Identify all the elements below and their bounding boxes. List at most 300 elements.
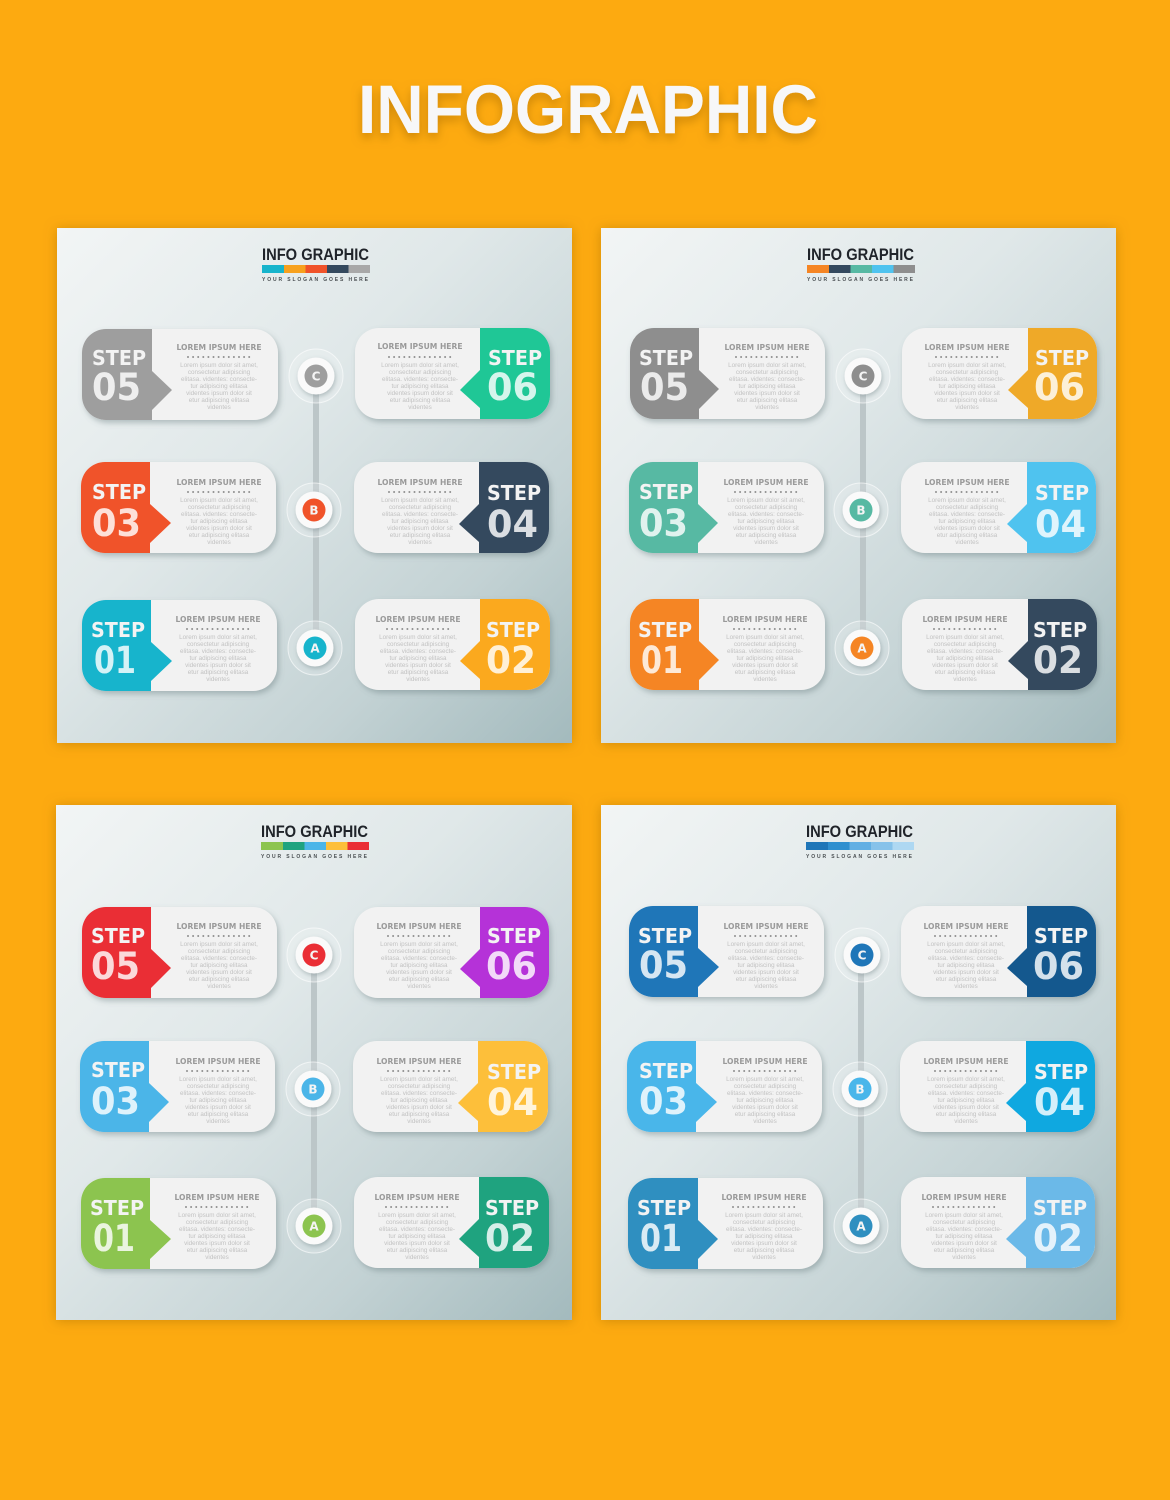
card: step 02: videntes ipsum dolor sit [384, 1240, 450, 1247]
card: step 03: videntes [207, 539, 231, 546]
card: step 04: STEP [487, 481, 541, 505]
card: step 06: Lorem ipsum dolor sit amet, [380, 941, 458, 948]
card: step 06: Lorem ipsum dolor sit amet, [381, 362, 459, 369]
card: step 01: LOREM IPSUM HERE [175, 615, 261, 624]
card: step 03: consectetur adipiscing [735, 504, 798, 511]
card: step 02: 02 [485, 1217, 535, 1260]
card: step 05: 05 [639, 944, 688, 987]
card: step 02: Lorem ipsum dolor sit amet, [925, 1212, 1003, 1219]
card: step 06: Lorem ipsum dolor sit amet, [927, 941, 1005, 948]
card: step 04: elitasa. videntes: consecte- [928, 1090, 1004, 1097]
card: step 04: LOREM IPSUM HERE [924, 478, 1010, 487]
card: step 03: LOREM IPSUM HERE [722, 1057, 808, 1066]
card: step 04: videntes ipsum dolor sit [387, 525, 453, 532]
card: step 01: LOREM IPSUM HERE [721, 1193, 807, 1202]
card: step 01: tur adipiscing elitasa [736, 655, 794, 662]
card: step 04: videntes [955, 539, 979, 546]
card: step 02: STEP [1033, 1196, 1087, 1220]
card: step 01 [628, 1178, 823, 1269]
marker C: C [310, 948, 319, 962]
card: step 02: LOREM IPSUM HERE [921, 1193, 1007, 1202]
card: step 04: consectetur adipiscing [388, 1083, 451, 1090]
card: step 04: Lorem ipsum dolor sit amet, [381, 497, 459, 504]
card: step 05: consectetur adipiscing [735, 948, 798, 955]
card: step 04: elitasa. videntes: consecte- [381, 1090, 457, 1097]
card: step 01: Lorem ipsum dolor sit amet, [725, 1212, 803, 1219]
card: step 01: videntes [753, 676, 777, 683]
card: step 04 [900, 1041, 1095, 1132]
card: step 04: tur adipiscing elitasa [938, 518, 996, 525]
card: step 03 [627, 1041, 822, 1132]
card: step 04: STEP [1034, 1060, 1088, 1084]
card: step 04: videntes ipsum dolor sit [933, 1104, 999, 1111]
card: step 05: etur adipiscing elitasa [189, 397, 250, 404]
card: step 01: STEP [638, 618, 692, 642]
panel header: YOUR SLOGAN GOES HERE [261, 854, 368, 860]
card: step 01 [82, 600, 277, 691]
card: step 03: elitasa. videntes: consecte- [180, 1090, 256, 1097]
card: step 01: videntes ipsum dolor sit [731, 1240, 797, 1247]
panel header: YOUR SLOGAN GOES HERE [806, 854, 913, 860]
card: step 05: etur adipiscing elitasa [737, 397, 798, 404]
card: step 01: 01 [641, 639, 683, 682]
card: step 01: elitasa. videntes: consecte- [726, 1226, 802, 1233]
card: step 04: tur adipiscing elitasa [390, 1097, 448, 1104]
card: step 01 [630, 599, 825, 690]
card: step 06: elitasa. videntes: consecte- [929, 376, 1005, 383]
card: step 06: LOREM IPSUM HERE [377, 342, 463, 351]
card: step 05: LOREM IPSUM HERE [723, 922, 809, 931]
card: step 03: STEP [639, 1059, 693, 1083]
card: step 01: consectetur adipiscing [186, 1219, 249, 1226]
card: step 03: consectetur adipiscing [188, 504, 251, 511]
card: step 04: videntes [954, 1118, 978, 1125]
card: step 04: videntes [407, 1118, 431, 1125]
card: step 03 [629, 462, 824, 553]
card: step 02: consectetur adipiscing [386, 1219, 449, 1226]
card: step 01: videntes ipsum dolor sit [185, 662, 251, 669]
title: INFOGRAPHIC [358, 71, 818, 148]
marker C [287, 928, 341, 982]
card: step 05: tur adipiscing elitasa [738, 383, 796, 390]
card: step 02: consectetur adipiscing [933, 1219, 996, 1226]
card: step 02: 02 [1033, 639, 1083, 682]
card: step 06: etur adipiscing elitasa [936, 976, 997, 983]
card: step 03: elitasa. videntes: consecte- [728, 511, 804, 518]
card: step 03: STEP [639, 480, 693, 504]
card: step 04: 04 [487, 1081, 538, 1124]
card: step 02: elitasa. videntes: consecte- [926, 1226, 1002, 1233]
card: step 01: STEP [90, 1196, 144, 1220]
card: step 04: etur adipiscing elitasa [937, 532, 998, 539]
card: step 03: tur adipiscing elitasa [737, 518, 795, 525]
marker C [835, 928, 889, 982]
card: step 04: Lorem ipsum dolor sit amet, [927, 1076, 1005, 1083]
card: step 02: videntes [953, 676, 977, 683]
card: step 03: elitasa. videntes: consecte- [727, 1090, 803, 1097]
panel: bottom left [56, 805, 572, 1320]
card: step 02: LOREM IPSUM HERE [375, 615, 461, 624]
card: step 02: STEP [1033, 618, 1087, 642]
card: step 06: STEP [488, 346, 542, 370]
card: step 06: tur adipiscing elitasa [390, 962, 448, 969]
card: step 02: tur adipiscing elitasa [936, 655, 994, 662]
card: step 06: videntes ipsum dolor sit [933, 969, 999, 976]
card: step 04: consectetur adipiscing [389, 504, 452, 511]
card: step 05: videntes ipsum dolor sit [733, 969, 799, 976]
card: step 05: videntes [754, 983, 778, 990]
card: step 06: 06 [1034, 366, 1085, 409]
marker A [835, 621, 889, 675]
card: step 01: tur adipiscing elitasa [189, 655, 247, 662]
card: step 04: elitasa. videntes: consecte- [382, 511, 458, 518]
card: step 05 [629, 906, 824, 997]
card: step 01: etur adipiscing elitasa [187, 1247, 248, 1254]
card: step 04: videntes ipsum dolor sit [386, 1104, 452, 1111]
card: step 05 [630, 328, 825, 419]
panel: bottom right [601, 805, 1116, 1320]
card: step 02: 02 [1033, 1217, 1083, 1260]
card: step 02: STEP [485, 1196, 539, 1220]
card: step 02: elitasa. videntes: consecte- [379, 1226, 455, 1233]
card: step 02: STEP [486, 618, 540, 642]
card: step 01: STEP [91, 618, 145, 642]
marker A: A [856, 1220, 866, 1234]
card: step 04: STEP [1035, 481, 1089, 505]
card: step 04: videntes [408, 539, 432, 546]
marker A [834, 1199, 888, 1253]
card: step 05: elitasa. videntes: consecte- [181, 376, 257, 383]
card: step 03: etur adipiscing elitasa [736, 532, 797, 539]
card: step 04: consectetur adipiscing [936, 504, 999, 511]
card: step 05: videntes ipsum dolor sit [186, 969, 252, 976]
card: step 03: 03 [639, 1080, 688, 1123]
panel header: INFO GRAPHIC [807, 245, 914, 264]
card: step 02: 02 [486, 639, 536, 682]
panel header [807, 245, 915, 283]
card: step 05: LOREM IPSUM HERE [724, 343, 810, 352]
marker B: B [309, 504, 319, 518]
card: step 04 [353, 1041, 548, 1132]
card: step 01: videntes ipsum dolor sit [184, 1240, 250, 1247]
card: step 05: Lorem ipsum dolor sit amet, [727, 941, 805, 948]
card: step 06: elitasa. videntes: consecte- [382, 376, 458, 383]
card: step 02: tur adipiscing elitasa [935, 1233, 993, 1240]
card: step 03: STEP [92, 480, 146, 504]
card: step 05: STEP [92, 346, 146, 370]
card: step 02: videntes [406, 676, 430, 683]
card: step 02: tur adipiscing elitasa [389, 655, 447, 662]
card: step 03: consectetur adipiscing [734, 1083, 797, 1090]
card: step 02: Lorem ipsum dolor sit amet, [379, 634, 457, 641]
card: step 03: etur adipiscing elitasa [735, 1111, 796, 1118]
marker B: B [855, 1082, 865, 1096]
card: step 02: LOREM IPSUM HERE [922, 615, 1008, 624]
card: step 01: elitasa. videntes: consecte- [727, 648, 803, 655]
card: step 04: LOREM IPSUM HERE [377, 478, 463, 487]
card: step 04: Lorem ipsum dolor sit amet, [928, 497, 1006, 504]
panel header [262, 245, 370, 283]
panel header: INFO GRAPHIC [261, 822, 368, 841]
card: step 01: videntes ipsum dolor sit [732, 662, 798, 669]
card: step 06: consectetur adipiscing [389, 369, 452, 376]
card: step 05: etur adipiscing elitasa [189, 976, 250, 983]
marker C: C [858, 948, 867, 962]
card: step 05: STEP [91, 924, 145, 948]
card: step 05: consectetur adipiscing [188, 369, 251, 376]
card: step 05: 05 [91, 945, 140, 988]
card: step 03: videntes [206, 1118, 230, 1125]
card: step 06: elitasa. videntes: consecte- [928, 955, 1004, 962]
card: step 05: Lorem ipsum dolor sit amet, [180, 941, 258, 948]
card: step 06 [355, 328, 550, 419]
card: step 05: videntes [755, 404, 779, 411]
card: step 02: LOREM IPSUM HERE [374, 1193, 460, 1202]
card: step 05: tur adipiscing elitasa [190, 962, 248, 969]
card: step 03: videntes ipsum dolor sit [186, 525, 252, 532]
card: step 01: Lorem ipsum dolor sit amet, [726, 634, 804, 641]
timeline connector [858, 955, 864, 1226]
card: step 02: etur adipiscing elitasa [934, 1247, 995, 1254]
card: step 01: videntes [206, 676, 230, 683]
marker A [288, 621, 342, 675]
card: step 05: 05 [640, 366, 689, 409]
card: step 04: Lorem ipsum dolor sit amet, [380, 1076, 458, 1083]
card: step 03: LOREM IPSUM HERE [723, 478, 809, 487]
card: step 01: elitasa. videntes: consecte- [179, 1226, 255, 1233]
card: step 01: STEP [637, 1196, 691, 1220]
card: step 05: STEP [639, 346, 693, 370]
card: step 02: tur adipiscing elitasa [388, 1233, 446, 1240]
card: step 02: etur adipiscing elitasa [388, 669, 449, 676]
card: step 06: consectetur adipiscing [388, 948, 451, 955]
card: step 06 [901, 906, 1096, 997]
panel header: YOUR SLOGAN GOES HERE [807, 277, 914, 283]
card: step 06: etur adipiscing elitasa [389, 976, 450, 983]
panel header [806, 822, 914, 860]
card: step 03 [80, 1041, 275, 1132]
card: step 05 [82, 329, 278, 420]
card: step 06: videntes [407, 983, 431, 990]
panel: top left [57, 228, 572, 743]
card: step 02: Lorem ipsum dolor sit amet, [926, 634, 1004, 641]
card: step 05: LOREM IPSUM HERE [176, 343, 262, 352]
card: step 04: etur adipiscing elitasa [389, 1111, 450, 1118]
panel header: YOUR SLOGAN GOES HERE [262, 277, 369, 283]
card: step 04: 04 [1035, 503, 1086, 546]
card: step 02: elitasa. videntes: consecte- [380, 648, 456, 655]
card: step 03 [81, 462, 276, 553]
card: step 04 [901, 462, 1096, 553]
card: step 04: tur adipiscing elitasa [937, 1097, 995, 1104]
card: step 03: 03 [92, 502, 141, 545]
card: step 03: 03 [639, 502, 688, 545]
card: step 05: videntes ipsum dolor sit [734, 390, 800, 397]
card: step 06 [902, 328, 1097, 419]
card: step 06: videntes ipsum dolor sit [386, 969, 452, 976]
card: step 03: videntes ipsum dolor sit [732, 1104, 798, 1111]
card: step 05: tur adipiscing elitasa [190, 383, 248, 390]
card: step 06: etur adipiscing elitasa [390, 397, 451, 404]
card: step 06: tur adipiscing elitasa [391, 383, 449, 390]
card: step 06: elitasa. videntes: consecte- [381, 955, 457, 962]
card: step 03: tur adipiscing elitasa [190, 518, 248, 525]
marker C [289, 349, 343, 403]
card: step 02: etur adipiscing elitasa [387, 1247, 448, 1254]
card: step 04: 04 [1034, 1081, 1085, 1124]
card: step 01: etur adipiscing elitasa [188, 669, 249, 676]
card: step 06: STEP [487, 924, 541, 948]
card: step 03: consectetur adipiscing [187, 1083, 250, 1090]
card: step 03: videntes ipsum dolor sit [733, 525, 799, 532]
card: step 02: Lorem ipsum dolor sit amet, [378, 1212, 456, 1219]
card: step 05: Lorem ipsum dolor sit amet, [728, 362, 806, 369]
card: step 01: LOREM IPSUM HERE [174, 1193, 260, 1202]
card: step 01: tur adipiscing elitasa [735, 1233, 793, 1240]
card: step 05: elitasa. videntes: consecte- [729, 376, 805, 383]
card: step 06: LOREM IPSUM HERE [924, 343, 1010, 352]
card: step 06: 06 [1033, 945, 1084, 988]
card: step 05: elitasa. videntes: consecte- [181, 955, 257, 962]
card: step 01: 01 [93, 1217, 135, 1260]
card: step 02: videntes [405, 1254, 429, 1261]
marker C: C [859, 370, 868, 384]
card: step 06: STEP [1034, 924, 1088, 948]
card: step 06: tur adipiscing elitasa [938, 383, 996, 390]
card: step 01: 01 [640, 1217, 682, 1260]
card: step 03: Lorem ipsum dolor sit amet, [179, 1076, 257, 1083]
card: step 06: STEP [1035, 346, 1089, 370]
card: step 05: videntes ipsum dolor sit [186, 390, 252, 397]
card: step 01: Lorem ipsum dolor sit amet, [178, 1212, 256, 1219]
card: step 05 [82, 907, 277, 998]
card: step 06: tur adipiscing elitasa [937, 962, 995, 969]
card: step 02: videntes ipsum dolor sit [385, 662, 451, 669]
card: step 04 [354, 462, 549, 553]
card: step 03: videntes ipsum dolor sit [185, 1104, 251, 1111]
card: step 06: LOREM IPSUM HERE [923, 922, 1009, 931]
panel: top right [601, 228, 1116, 743]
card: step 01: videntes [752, 1254, 776, 1261]
marker B [287, 483, 341, 537]
card: step 02: etur adipiscing elitasa [935, 669, 996, 676]
card: step 01 [81, 1178, 276, 1269]
card: step 02: consectetur adipiscing [934, 641, 997, 648]
card: step 02 [355, 599, 550, 690]
card: step 05: 05 [92, 366, 141, 409]
panel header [261, 822, 369, 860]
card: step 06: consectetur adipiscing [935, 948, 998, 955]
card: step 06: videntes ipsum dolor sit [934, 390, 1000, 397]
card: step 06: 06 [486, 945, 537, 988]
card: step 03: Lorem ipsum dolor sit amet, [727, 497, 805, 504]
card: step 01: 01 [94, 639, 136, 682]
panel header: INFO GRAPHIC [262, 245, 369, 264]
card: step 04: elitasa. videntes: consecte- [929, 511, 1005, 518]
timeline connector [311, 955, 317, 1226]
card: step 04: 04 [487, 503, 538, 546]
card: step 06: Lorem ipsum dolor sit amet, [928, 362, 1006, 369]
card: step 04: consectetur adipiscing [935, 1083, 998, 1090]
card: step 03: LOREM IPSUM HERE [175, 1057, 261, 1066]
card: step 01: elitasa. videntes: consecte- [180, 648, 256, 655]
card: step 03: STEP [91, 1058, 145, 1082]
card: step 01: videntes [205, 1254, 229, 1261]
card: step 02: elitasa. videntes: consecte- [927, 648, 1003, 655]
card: step 05: consectetur adipiscing [188, 948, 251, 955]
card: step 06: LOREM IPSUM HERE [376, 922, 462, 931]
card: step 03: videntes [754, 539, 778, 546]
card: step 04: videntes ipsum dolor sit [934, 525, 1000, 532]
marker C: C [312, 370, 321, 384]
card: step 05: etur adipiscing elitasa [736, 976, 797, 983]
card: step 03: elitasa. videntes: consecte- [181, 511, 257, 518]
card: step 02 [901, 1177, 1095, 1268]
card: step 02: consectetur adipiscing [387, 641, 450, 648]
timeline connector [313, 376, 319, 648]
marker B [833, 1062, 887, 1116]
timeline connector [860, 376, 866, 648]
card: step 01: consectetur adipiscing [187, 641, 250, 648]
card: step 02 [902, 599, 1097, 690]
card: step 04: etur adipiscing elitasa [390, 532, 451, 539]
card: step 06: etur adipiscing elitasa [937, 397, 998, 404]
card: step 05: Lorem ipsum dolor sit amet, [180, 362, 258, 369]
card: step 06: consectetur adipiscing [936, 369, 999, 376]
card: step 04: LOREM IPSUM HERE [923, 1057, 1009, 1066]
marker B: B [308, 1082, 318, 1096]
card: step 01: LOREM IPSUM HERE [722, 615, 808, 624]
card: step 05: videntes [207, 404, 231, 411]
card: step 03: tur adipiscing elitasa [736, 1097, 794, 1104]
card: step 02: videntes ipsum dolor sit [931, 1240, 997, 1247]
card: step 03: videntes [753, 1118, 777, 1125]
card: step 04: etur adipiscing elitasa [936, 1111, 997, 1118]
card: step 01: etur adipiscing elitasa [735, 669, 796, 676]
marker A: A [310, 642, 320, 656]
card: step 05: LOREM IPSUM HERE [176, 922, 262, 931]
card: step 05: videntes [207, 983, 231, 990]
card: step 02: videntes ipsum dolor sit [932, 662, 998, 669]
card: step 03: LOREM IPSUM HERE [176, 478, 262, 487]
card: step 03: Lorem ipsum dolor sit amet, [180, 497, 258, 504]
card: step 01: tur adipiscing elitasa [188, 1233, 246, 1240]
card: step 06 [354, 907, 549, 998]
card: step 02: videntes [952, 1254, 976, 1261]
card: step 06: videntes ipsum dolor sit [387, 390, 453, 397]
marker C [836, 349, 890, 403]
card: step 01: etur adipiscing elitasa [734, 1247, 795, 1254]
card: step 06: videntes [954, 983, 978, 990]
card: step 01: consectetur adipiscing [734, 641, 797, 648]
panel header: INFO GRAPHIC [806, 822, 913, 841]
card: step 05: tur adipiscing elitasa [737, 962, 795, 969]
card: step 03: 03 [91, 1080, 140, 1123]
card: step 03: Lorem ipsum dolor sit amet, [726, 1076, 804, 1083]
card: step 06: videntes [408, 404, 432, 411]
marker A [287, 1199, 341, 1253]
card: step 03: tur adipiscing elitasa [189, 1097, 247, 1104]
card: step 03: etur adipiscing elitasa [188, 1111, 249, 1118]
marker B [834, 483, 888, 537]
marker B: B [856, 504, 866, 518]
card: step 04: LOREM IPSUM HERE [376, 1057, 462, 1066]
card: step 02 [354, 1177, 549, 1268]
card: step 01: consectetur adipiscing [733, 1219, 796, 1226]
card: step 05: STEP [638, 924, 692, 948]
card: step 06: videntes [955, 404, 979, 411]
marker A: A [857, 642, 867, 656]
